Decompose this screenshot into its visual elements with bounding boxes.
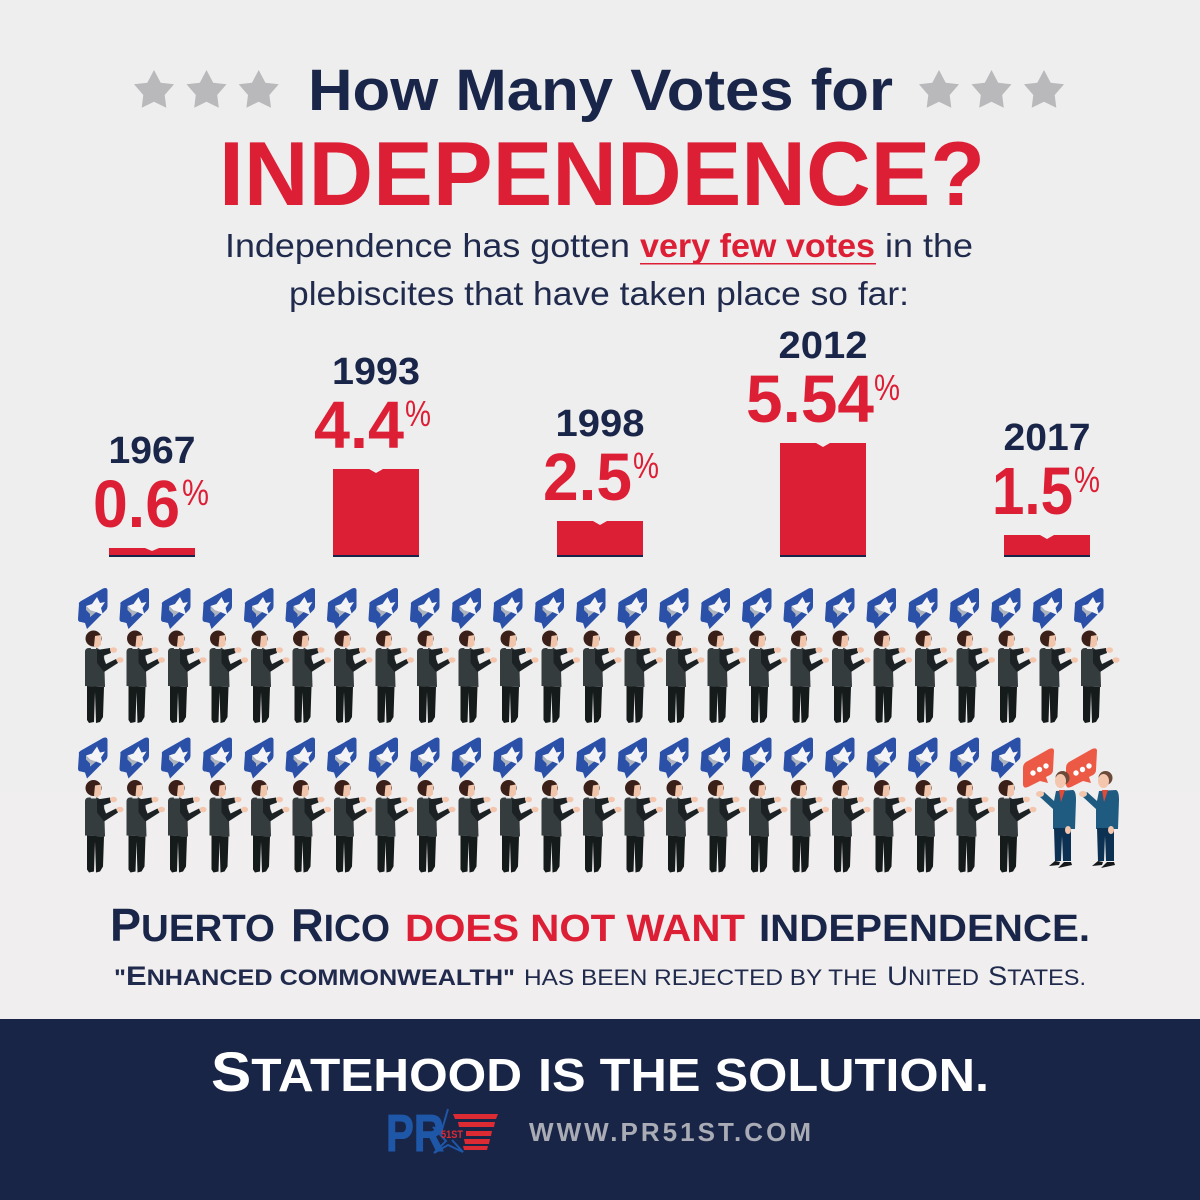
logo: PR51st: PR [386, 1105, 444, 1163]
intro text: Independence has gotten [225, 227, 630, 264]
statement: does not want independence [110, 899, 1090, 951]
logo: PR51st [386, 1105, 498, 1163]
bar 1998 [543, 403, 659, 557]
bar chart: vote share by year [93, 325, 1100, 557]
statement: does not want independence: INDEPENDENCE. [759, 908, 1090, 950]
statement: enhanced commonwealth: UNITED [887, 961, 979, 991]
bar 1993 [314, 351, 431, 557]
bar 2017: % [1074, 459, 1100, 500]
stars right [919, 70, 1064, 108]
bar 1998: 2.5 [543, 440, 632, 515]
statement: does not want independence: PUERTO [110, 899, 275, 951]
intro text: very few votes [640, 227, 875, 264]
bar 1998: % [633, 445, 659, 486]
bar 2012: % [874, 367, 900, 408]
bar 1993: 4.4 [314, 388, 404, 463]
bar 2017: 2017 [1004, 417, 1090, 459]
bar 1967: % [182, 472, 209, 513]
intro text: plebiscites that have taken place so far: [289, 275, 909, 312]
statement: enhanced commonwealth: "ENHANCED COMMONWEALTH" [114, 961, 515, 991]
bar 2012: 5.54 [746, 362, 874, 437]
statement: enhanced commonwealth: HAS BEEN REJECTED BY THE [524, 965, 877, 990]
bar 1967: 1967 [108, 430, 196, 472]
footer headline [211, 1040, 989, 1103]
people row 2: voters [78, 738, 1036, 872]
bar 2012: 2012 [778, 325, 868, 367]
bar 1993: 1993 [332, 351, 420, 393]
bar 1998: 1998 [556, 403, 644, 445]
footer headline: STATEHOOD [211, 1040, 522, 1103]
stars left [134, 70, 279, 108]
intro text [225, 227, 973, 312]
logo: PR51st: 51ST [441, 1129, 463, 1141]
people row 1: voters [78, 588, 1120, 723]
bar 1993: % [405, 393, 431, 434]
bar 2012 [746, 325, 900, 557]
footer headline: IS THE SOLUTION. [538, 1049, 989, 1101]
bar 2017 [992, 417, 1100, 557]
statement: does not want independence: DOES NOT WANT [405, 908, 745, 950]
intro text: in the [885, 227, 973, 264]
footer band [0, 1019, 1200, 1200]
bar 1967 [93, 430, 209, 557]
title: How Many Votes for [308, 58, 893, 123]
statement: enhanced commonwealth: STATES. [988, 961, 1086, 991]
statement: enhanced commonwealth [114, 961, 1086, 991]
website url: WWW.PR51ST.COM [529, 1117, 811, 1147]
bar 2017: 1.5 [992, 454, 1073, 529]
bar 1967: 0.6 [93, 467, 180, 542]
statement: does not want independence: RICO [291, 899, 390, 951]
people: two officials in blue suits with speech bubbles [1023, 748, 1119, 868]
title: independence: INDEPENDENCE? [219, 124, 985, 225]
